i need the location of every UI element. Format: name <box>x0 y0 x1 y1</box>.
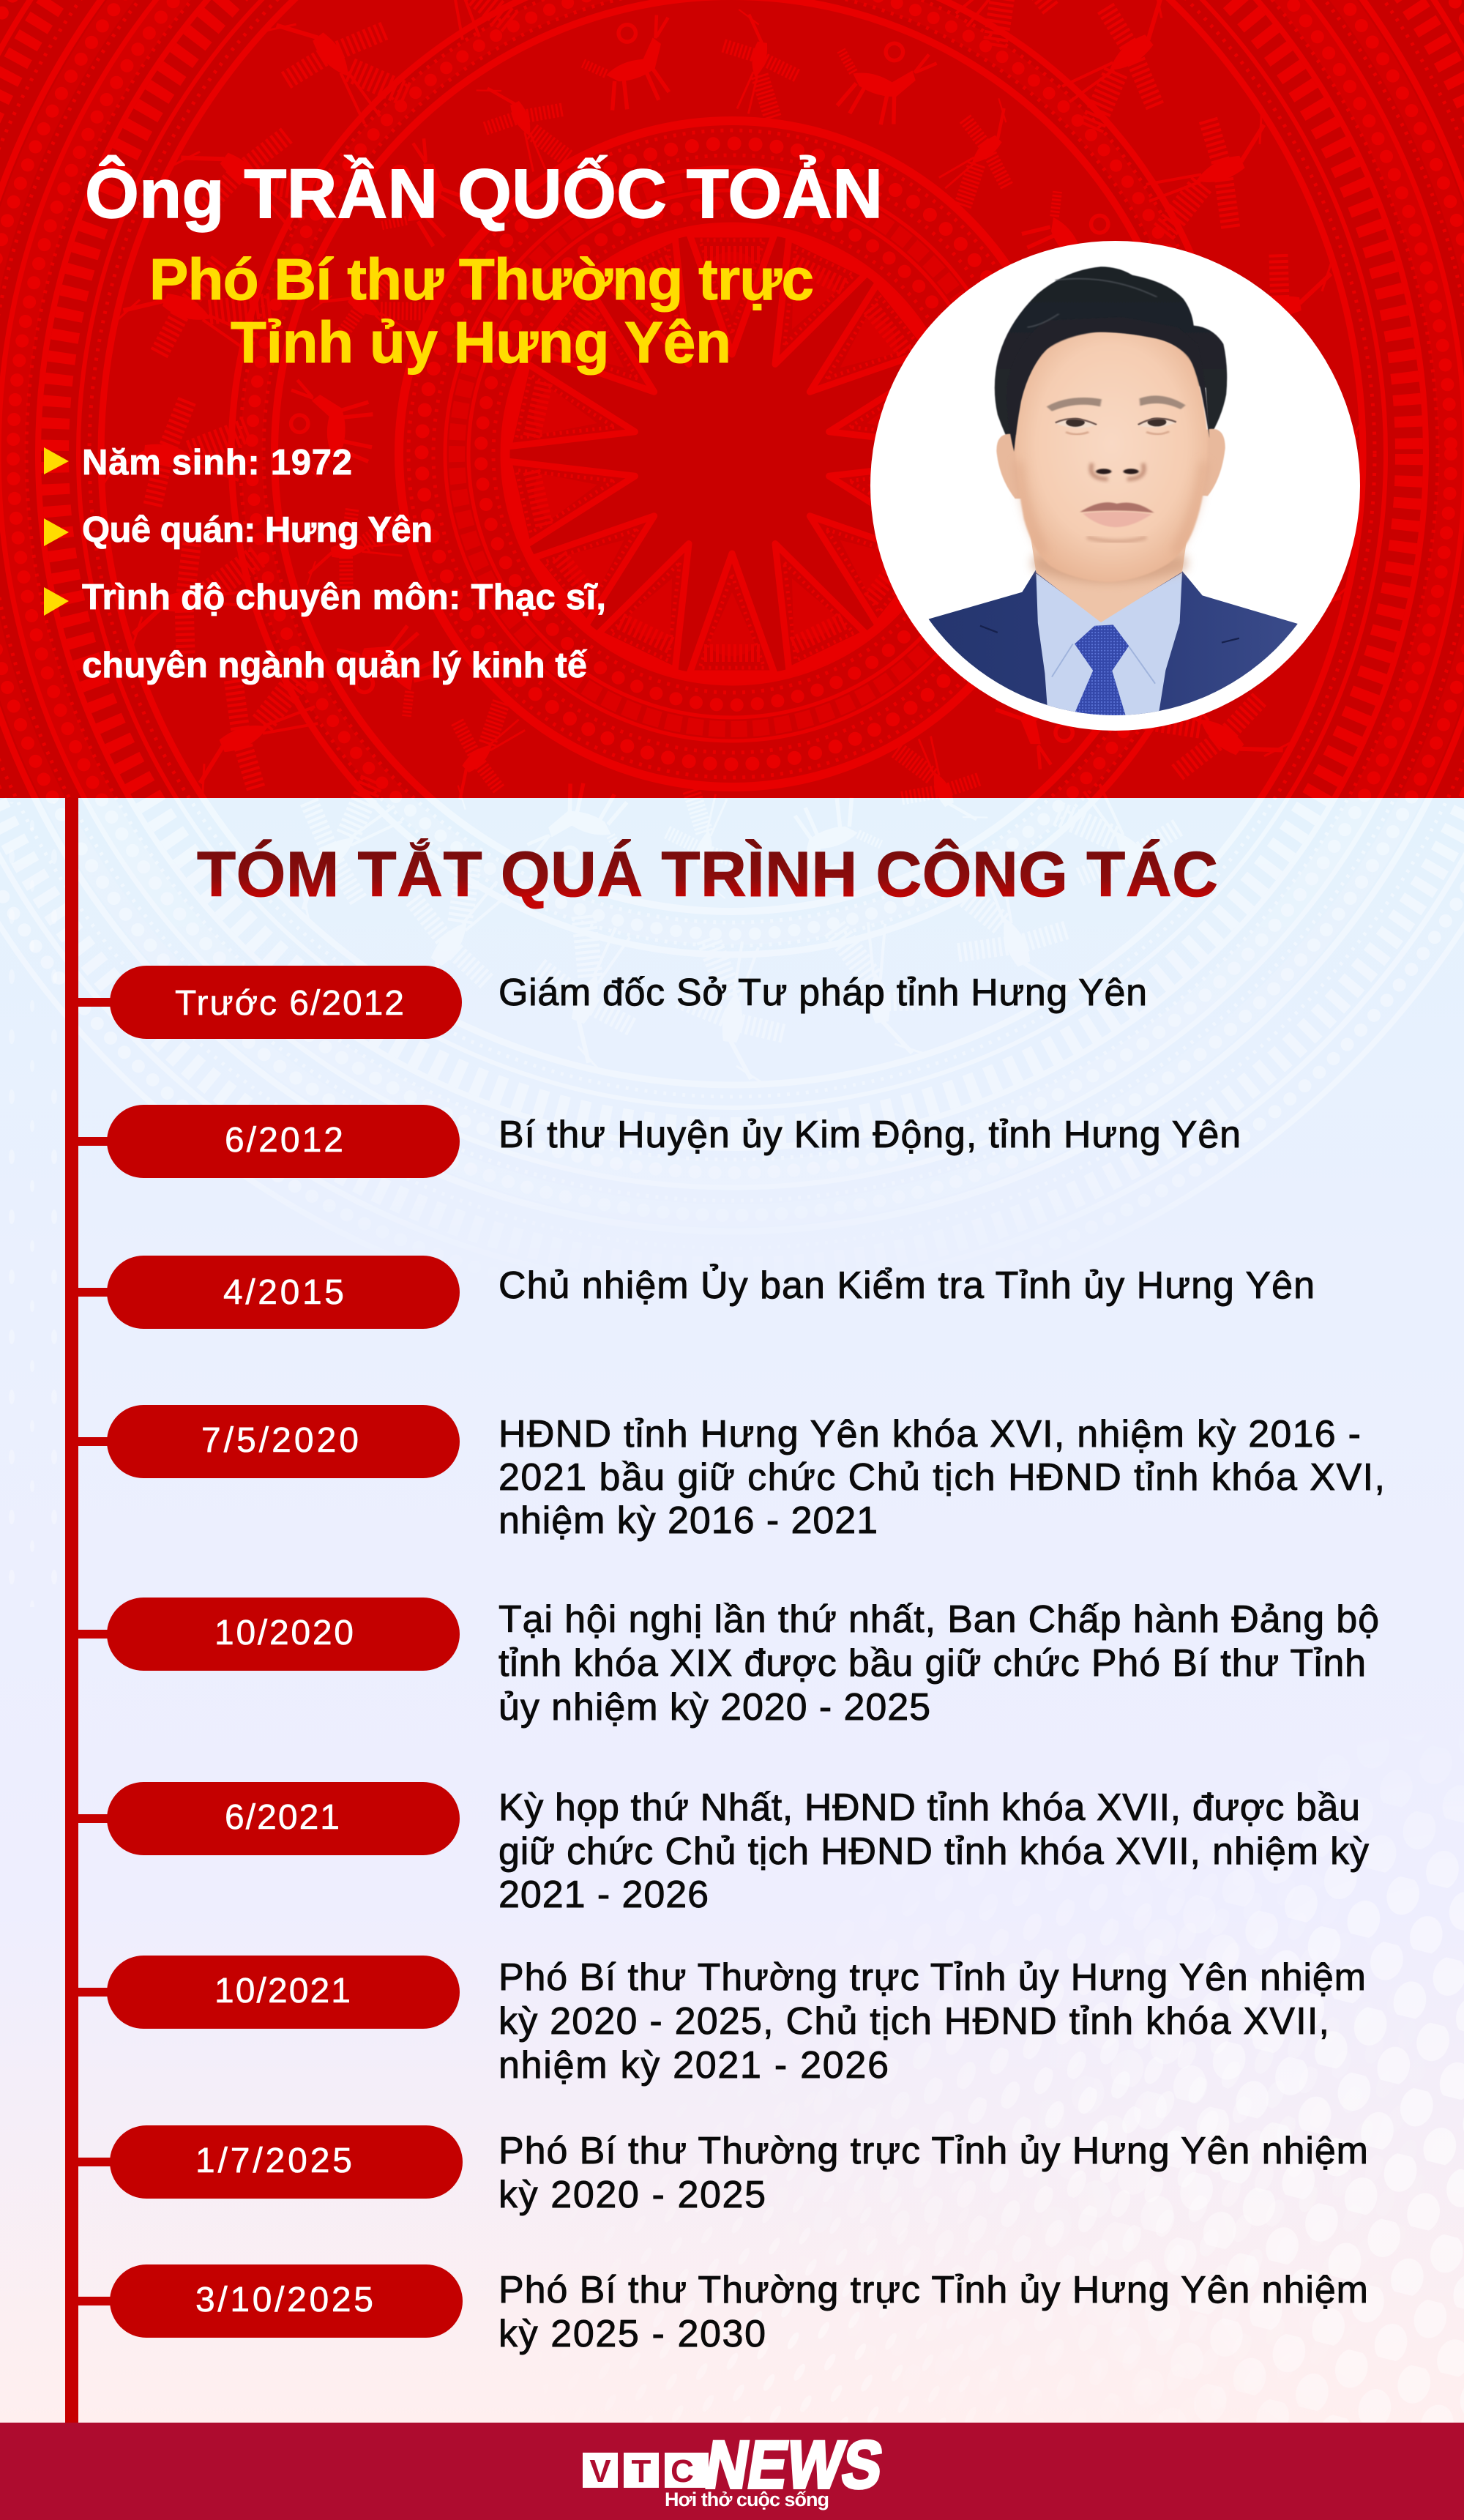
timeline item: 6/2012: 6/2012 <box>225 1121 343 1160</box>
bullet: birth year: Năm sinh: 1972 <box>82 443 352 482</box>
neck <box>1031 536 1186 622</box>
panel: profile header <box>0 0 1464 798</box>
subtitle: position: Tỉnh ủy Hưng Yên <box>231 310 731 375</box>
logo: VTC News <box>583 2427 888 2502</box>
logo: VTC News: NEWS <box>701 2427 888 2502</box>
timeline item: 3/10/2025: Phó Bí thư Thường trực Tỉnh ủy Hưng Yên nhiệm <box>498 2269 1368 2311</box>
timeline item: 7/5/2020: HĐND tỉnh Hưng Yên khóa XVI, nhiệm kỳ 2016 - <box>498 1413 1361 1455</box>
timeline item: 4/2015: 4/2015 <box>223 1273 344 1312</box>
timeline item: 10/2020 <box>78 1598 1379 1729</box>
timeline item: before 6/2012: Trước 6/2012 <box>175 984 404 1023</box>
timeline item: 6/2012: Bí thư Huyện ủy Kim Động, tỉnh Hưng Yên <box>498 1114 1241 1156</box>
timeline item: 10/2021: nhiệm kỳ 2021 - 2026 <box>498 2044 889 2087</box>
timeline vertical line <box>65 798 78 2423</box>
timeline item: 7/5/2020: 7/5/2020 <box>201 1421 359 1460</box>
subtitle: position: Phó Bí thư Thường trực <box>149 247 814 312</box>
background: bronze drum pattern <box>0 0 1464 798</box>
timeline item: 6/2021: 2021 - 2026 <box>498 1874 709 1916</box>
timeline item: 7/5/2020: nhiệm kỳ 2016 - 2021 <box>498 1499 878 1542</box>
timeline item: 6/2021: giữ chức Chủ tịch HĐND tỉnh khóa XVII, nhiệm kỳ <box>498 1830 1369 1873</box>
timeline item: 10/2020: tỉnh khóa XIX được bầu giữ chức Phó Bí thư Tỉnh <box>498 1642 1366 1685</box>
heading: career summary: TÓM TẮT QUÁ TRÌNH CÔNG TÁC <box>197 839 1218 910</box>
timeline item: 1/7/2025: kỳ 2020 - 2025 <box>498 2174 766 2216</box>
logo: VTC News: T <box>632 2453 651 2489</box>
timeline item: 1/7/2025: Phó Bí thư Thường trực Tỉnh ủy Hưng Yên nhiệm <box>498 2130 1368 2172</box>
portrait photo in white circle <box>870 241 1360 758</box>
panel: footer <box>0 2423 1464 2520</box>
timeline item: 4/2015: Chủ nhiệm Ủy ban Kiểm tra Tỉnh ủy Hưng Yên <box>498 1264 1315 1307</box>
timeline item: 6/2012 <box>78 1105 1241 1178</box>
timeline item: 3/10/2025: kỳ 2025 - 2030 <box>498 2313 766 2355</box>
bullet: qualification <box>44 578 606 685</box>
timeline item: 10/2021: kỳ 2020 - 2025, Chủ tịch HĐND tỉnh khóa XVII, <box>498 2000 1329 2043</box>
subtitle: position <box>149 247 814 375</box>
timeline item: 6/2021 <box>78 1782 1369 1916</box>
logo: VTC News: C <box>671 2453 694 2489</box>
timeline item: 10/2020: ủy nhiệm kỳ 2020 - 2025 <box>498 1686 930 1729</box>
necktie <box>1073 625 1129 717</box>
timeline item: 4/2015 <box>78 1256 1315 1329</box>
timeline item: 3/10/2025 <box>78 2264 1368 2355</box>
timeline item: 10/2021 <box>78 1956 1366 2087</box>
timeline item: 10/2020: 10/2020 <box>214 1614 354 1652</box>
facial features <box>1047 395 1186 542</box>
face <box>1015 331 1208 582</box>
timeline item: 6/2021: 6/2021 <box>225 1798 340 1837</box>
shirt <box>1036 573 1182 720</box>
timeline item: 3/10/2025: 3/10/2025 <box>195 2281 373 2319</box>
timeline item: 10/2021: 10/2021 <box>214 1972 351 2010</box>
background: faint drum pattern <box>0 798 1464 1078</box>
logo tagline: Hơi thở cuộc sống <box>665 2489 829 2510</box>
suit jacket <box>928 570 1298 715</box>
timeline item: before 6/2012: Giám đốc Sở Tư pháp tỉnh Hưng Yên <box>498 972 1147 1014</box>
timeline item: before 6/2012 <box>78 966 1147 1039</box>
logo: VTC News: V <box>589 2453 611 2489</box>
timeline item: 7/5/2020: 2021 bầu giữ chức Chủ tịch HĐND tỉnh khóa XVI, <box>498 1456 1385 1499</box>
background: halftone dots <box>107 983 1464 2327</box>
timeline item: 10/2021: Phó Bí thư Thường trực Tỉnh ủy Hưng Yên nhiệm <box>498 1956 1366 1999</box>
bullet: home town: Quê quán: Hưng Yên <box>82 510 433 550</box>
timeline item: 1/7/2025 <box>78 2125 1368 2216</box>
bullet: qualification: Trình độ chuyên môn: Thạc sĩ, <box>82 578 606 617</box>
hair base <box>995 266 1227 452</box>
timeline item: 6/2021: Kỳ họp thứ Nhất, HĐND tỉnh khóa XVII, được bầu <box>498 1786 1360 1829</box>
timeline item: 7/5/2020 <box>78 1405 1385 1542</box>
title: name: Ông TRẦN QUỐC TOẢN <box>85 155 883 233</box>
bullet: qualification: chuyên ngành quản lý kinh tế <box>82 646 588 685</box>
panel: career summary <box>0 798 1464 2423</box>
timeline item: 10/2020: Tại hội nghị lần thứ nhất, Ban Chấp hành Đảng bộ <box>498 1598 1379 1641</box>
ears <box>996 434 1024 499</box>
hair front <box>1010 329 1210 452</box>
timeline item: 1/7/2025: 1/7/2025 <box>195 2141 352 2180</box>
